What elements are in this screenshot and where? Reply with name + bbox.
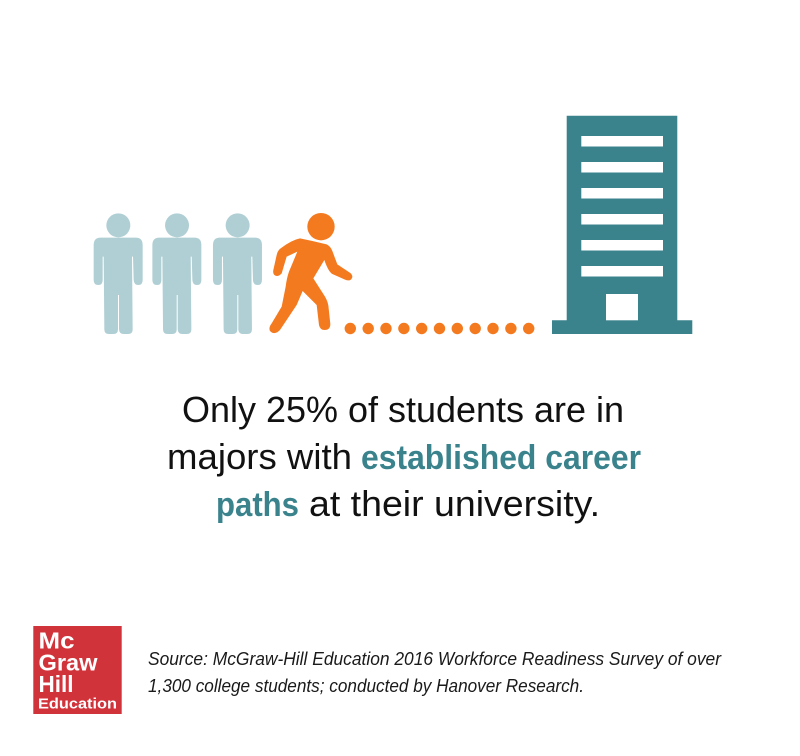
source note: 1,300 college students; conducted by Hanover Research. (148, 676, 584, 696)
main statement: established career (361, 439, 641, 477)
icon: walking person (269, 213, 352, 333)
icon: office building (552, 116, 692, 334)
source note (148, 649, 722, 696)
main statement (167, 389, 641, 524)
logo: McGraw-Hill Education (33, 626, 122, 714)
source note: Source: McGraw-Hill Education 2016 Workforce Readiness Survey of over (148, 649, 722, 669)
icon: person 2 (152, 213, 201, 334)
logo: McGraw-Hill Education: Education (38, 696, 117, 712)
main statement: majors with (167, 436, 352, 477)
logo: McGraw-Hill Education: Mc (38, 628, 75, 654)
icon: person 3 (213, 213, 262, 334)
icon: person 1 (94, 213, 143, 334)
main statement: Only 25% of students are in (182, 389, 624, 430)
logo: McGraw-Hill Education: Hill (38, 671, 74, 697)
main statement: at their university. (309, 483, 600, 524)
dotted path to building (345, 323, 534, 334)
logo: McGraw-Hill Education: Graw (38, 650, 98, 676)
main statement: paths (216, 486, 299, 524)
